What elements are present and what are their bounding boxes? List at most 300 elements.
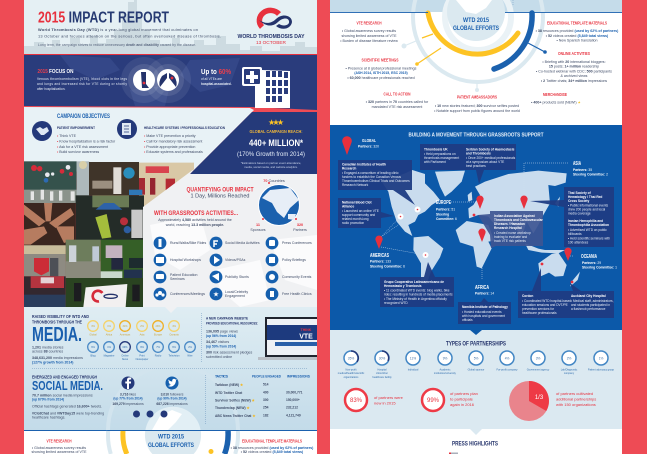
icon: hospital building (242, 67, 290, 108)
stat: 99% again: of partners plan (450, 391, 478, 396)
region labels: Partners: 320 (358, 144, 379, 148)
media type rings: 9% (140, 346, 145, 349)
info box: Cordon and Auckland: education sessions and DVT/PE (522, 303, 568, 307)
social media heading: SOCIAL MEDIA. (32, 378, 103, 393)
stat: 99% again: to participate (450, 396, 474, 402)
tactics table: 514 (263, 382, 269, 386)
impact headings: 1 Day, Millions Reached (190, 194, 250, 200)
tactics table: 150,000+ (286, 398, 300, 402)
tactics table: Thunderclap (NEW) ★ (215, 406, 250, 410)
activity icons grid: Social Media Activities (225, 241, 260, 245)
partnership rings: Lab/Diagnostic (561, 368, 578, 372)
region rings: 2% (140, 325, 145, 328)
region rings: 4% (172, 325, 177, 328)
partnership rings: 30% (379, 356, 385, 360)
info box: Cordon and Auckland: prevention services for (522, 307, 555, 311)
hub title: WTD 2015 (463, 17, 489, 24)
partnership rings: 11% (410, 356, 416, 360)
media type rings: Magazine (104, 354, 115, 358)
partnership rings: medical/health/scientific (338, 372, 365, 375)
text: VTE research: VTE RESEARCH (356, 20, 382, 26)
tactics table: ABC News Twitter Chat ★ (215, 414, 255, 418)
partnership rings: 5% (474, 356, 478, 360)
website stats: (up 59% from 2014) (206, 344, 236, 348)
info box: Thai and Iranian societies: • Public informational events (568, 204, 609, 208)
text: call to action (366, 92, 429, 109)
info box: Cordon and Auckland: healthcare professionals (522, 311, 557, 315)
stat: 83% new partners: 83% (350, 398, 363, 404)
icon: twitter (166, 376, 178, 390)
website stats: 136,095 page views (206, 330, 238, 334)
partnership rings: Individual (408, 368, 419, 372)
info box: Namibia Institute: Namibia Institute of Pathology (462, 305, 508, 309)
info box: Thai and Iranian societies: Iranian Hemophilia and (568, 219, 603, 223)
partnership rings: 4% (505, 356, 509, 360)
media type rings: 2% (188, 346, 193, 349)
region rings: 23% (155, 325, 161, 328)
media type rings: News (122, 358, 129, 361)
info box: Indian Association: • Created nurse workshop (494, 231, 531, 235)
text: online activities: • Co-hosted webinar with CDC; 500 participants (536, 70, 612, 74)
facebook stats (112, 392, 144, 406)
activity icons grid: Hospital Workshops (170, 258, 201, 262)
info box: Cordon and Auckland (518, 268, 614, 318)
website stats (206, 316, 258, 359)
info box: Grupo Cooperativo (380, 262, 454, 307)
panel: global efforts (left page fragment): • Global awareness survey results (32, 446, 86, 450)
healthcare education list: HEALTHCARE SYSTEMS / PROFESSIONALS EDUCATION (144, 126, 225, 130)
pale globe and arcs rising from the section below (108, 365, 238, 430)
panel: global campaign reach (190, 112, 317, 174)
activity icons grid: Community Events (282, 275, 312, 279)
region labels: Partners: 35 (573, 168, 592, 172)
text: call to action: CALL TO ACTION (384, 92, 410, 96)
region labels: ASIA (573, 161, 581, 167)
partnership rings: 9% (443, 356, 447, 360)
region labels: Partners: 14 (475, 292, 494, 296)
panel: media and social media (24, 307, 317, 431)
info box: National Blood Clot Alliance: Alliance (342, 204, 354, 208)
stat: 83% new partners: of partners were (374, 395, 404, 400)
stat: 99% again: again in 2016 (450, 402, 475, 407)
region labels: Committee: 6 (436, 217, 457, 221)
pie: one third: 1/3 (535, 395, 544, 401)
info box: Namibia Institute: with hospitals and government (462, 314, 505, 318)
region labels (358, 138, 617, 296)
activity icons grid: ★ (213, 290, 219, 298)
panel: global efforts (left page fragment): WTD 2015 (158, 434, 184, 440)
region rings: 31% (122, 325, 128, 328)
activity icons grid: Runs/Walks/Bike Rides (170, 241, 206, 245)
region labels: Partners: 51 (436, 208, 455, 212)
info box: Namibia Institute (458, 298, 511, 324)
info box: Cordon and Auckland: a flashmob performance (571, 307, 606, 311)
media type rings: Online (121, 354, 129, 358)
info box: Namibia Institute: officials (462, 318, 473, 322)
tactics table: 232,212 (286, 406, 298, 410)
panel: global campaign reach: GLOBAL CAMPAIGN REACH: (250, 129, 303, 134)
partnership rings: Global sponsor (468, 368, 485, 372)
text: scientific meetings: (ASH 2014, ISTH 2015, ESC 2015) (354, 71, 408, 75)
focus text (37, 69, 127, 91)
info box: Thai and Iranian societies: Cross Society (568, 199, 589, 203)
icon: facebook (122, 376, 134, 390)
healthcare education list: • Educate systems and professionals (144, 150, 203, 154)
partnership rings: institution/university (434, 372, 457, 375)
text: online activities: 15 posts; 1+ million readership (549, 64, 599, 68)
info box: Canadian Institutes: Canadian Institutes of Health (342, 162, 386, 166)
tactics table: 300 (263, 398, 269, 402)
tactics table: 400 (263, 390, 269, 394)
icon: leg and lung circles (121, 57, 191, 103)
stat: up to 60%: of all VTEs are (201, 77, 222, 81)
panel: types of partnerships: TYPES OF PARTNERSHIPS (446, 342, 506, 348)
region rings: Oceania (169, 334, 179, 336)
panel: header (24, 0, 317, 55)
text: educational materials: • 52 videos created (5,849 total views) (546, 34, 609, 38)
partnership rings: 1% (599, 356, 603, 360)
stat: 83% new partners: new in 2015 (374, 400, 396, 406)
tactics table: TACTICS (215, 374, 229, 378)
logo: World Thrombosis Day: WORLD THROMBOSIS DAY (238, 34, 305, 40)
info box: Thai and Iranian societies: Hematology / Thai Red (568, 195, 602, 199)
media heading: THROMBOSIS THROUGH THE (32, 320, 82, 324)
text: merchandise: MERCHANDISE (543, 92, 567, 97)
website stats: 300 risk assessment pledges (206, 350, 253, 354)
text: scientific meetings (346, 58, 417, 80)
info box: Indian Association (478, 211, 543, 248)
text: scientific meetings: SCIENTIFIC MEETINGS (362, 58, 398, 62)
activity icons grid: Videos/PSAs (225, 258, 246, 262)
partnership rings: Hospital (377, 368, 387, 372)
info box: National Blood Clot Alliance: • Launched an online VTE (342, 209, 379, 213)
text: call to action: • 320 partners in 70 countries called for (366, 100, 429, 104)
panel: types of partnerships (330, 330, 622, 429)
activity icons grid: Publicity Stunts (225, 275, 249, 279)
media type rings: Radio (155, 354, 162, 358)
globe with stats (250, 179, 307, 232)
impact headings: Approximately 4,580 activities held around the (158, 218, 232, 222)
region rings: Global (89, 334, 97, 336)
panel: global campaign reach: *Estimations based on partner event attendance, (241, 161, 301, 165)
pie: one third: with 150 organizations (556, 402, 596, 407)
text: educational materials: EDUCATIONAL TEMPLATE MATERIALS (547, 20, 607, 26)
tactics table: Survivor Selfies (NEW) ★ (215, 398, 255, 402)
info box: Canadian Institutes: Research Network (342, 183, 369, 187)
info box: Cordon and Auckland: Cordon (522, 294, 533, 298)
patient empowerment list: • Know hospitalization is a risk factor (57, 140, 116, 144)
text: patient ambassadors: • 10 new stories featured; 300 survivor selfies posted (435, 104, 519, 108)
impact headings: QUANTIFYING OUR IMPACT (186, 188, 254, 194)
facebook stats: 169,279 impressions (112, 402, 144, 406)
media type rings: 7% (156, 346, 161, 349)
info box: Indian Association: Thrombosis and Cardiovascular (494, 218, 543, 222)
partnership rings: company (564, 372, 575, 375)
info box: Indian Association: Indian Association Against (494, 214, 536, 218)
info box: Thrombosis UK and Serbian Society: at a symposium about VTE (466, 160, 504, 164)
text: educational materials (536, 20, 619, 42)
partnership rings: Government agency (527, 368, 550, 372)
text: call to action: mandated VTE risk assessment (372, 105, 422, 109)
media heading: MEDIA. (32, 324, 82, 346)
logo: World Thrombosis Day (238, 10, 305, 45)
globe with stats: Partners (293, 228, 307, 232)
tactics table: 182 (263, 414, 269, 418)
stat: 83% new partners (345, 389, 404, 411)
media type rings (88, 342, 195, 361)
region labels: AMERICAS (370, 253, 389, 259)
social media heading: #ClotChat and #WTDay15 were top-trending (32, 412, 104, 416)
laptop screenshot: VTE (299, 334, 313, 340)
panel: global campaign reach: 440+ MILLION* (249, 138, 303, 148)
twitter stats: (up 90% from 2014) (157, 396, 187, 400)
info box: Thrombosis UK and Serbian Society: • Once 200+ medical professionals (466, 156, 516, 160)
icon: handshake (32, 121, 52, 141)
panel: press highlights (330, 429, 622, 454)
activity icons grid: Local/Celebrity (225, 290, 248, 294)
info box: Grupo Cooperativo: recognized WTD (384, 301, 408, 305)
stat: 99% again (422, 389, 478, 411)
faint world map (60, 55, 240, 106)
social media heading: 70.7 million social media impressions (32, 394, 93, 398)
info box: Thrombosis UK and Serbian Society: best practices (466, 164, 486, 168)
region labels: Steering Committee: 2 (573, 172, 608, 176)
region labels: AFRICA (475, 285, 489, 291)
markers (342, 136, 573, 283)
info box: Indian Association: Research Hospital (494, 226, 522, 230)
twitter stats (156, 392, 188, 406)
stat: up to 60%: Up to 60% (201, 69, 232, 76)
facebook stats: 3,716 likes (120, 392, 136, 396)
panel: global efforts (left page fragment) (24, 431, 317, 454)
info box: Thai and Iranian societies: Thrombophilia Association (568, 223, 609, 227)
activity icons grid: Policy Briefings (282, 258, 306, 262)
logo: World Thrombosis Day: 13 OCTOBER (256, 40, 287, 45)
panel: campaign objectives (24, 107, 254, 175)
partnership rings: Patient advocacy group (588, 368, 615, 372)
partnership rings: 2% (567, 356, 571, 360)
text: scientific meetings: • Presence at 8 global professional meetings (346, 66, 417, 70)
healthcare education list: • Provide appropriate prevention (144, 145, 195, 149)
panel: global efforts (left page fragment): showing limited awareness of VTE (32, 450, 87, 454)
info box: Grupo Cooperativo: • The Ministry of Health in Argentina officially (384, 297, 447, 301)
tactics table: 254 (263, 406, 269, 410)
hub title (453, 17, 500, 32)
patient empowerment list: PATIENT EMPOWERMENT (57, 126, 96, 130)
hub title: GLOBAL EFFORTS (453, 25, 500, 32)
partnership rings: For-profit company (497, 368, 518, 372)
text: VTE research: showing limited awareness of VTE (342, 34, 397, 38)
info box: Canadian Institutes: Thromboembolism Clinical Trials and Outcomes (342, 179, 410, 183)
partnership rings: organizations (344, 376, 359, 379)
partnership rings: Academic (440, 368, 451, 372)
info box: Thrombosis UK and Serbian Society: Thrombosis UK (424, 148, 448, 152)
globe with stats: 70 Countries (263, 179, 285, 183)
info box: Cordon and Auckland: • Medical staff, administrators, (571, 299, 614, 303)
text: merchandise (531, 92, 582, 104)
info box: National Blood Clot Alliance (338, 198, 394, 228)
patient empowerment list: • Ask for a VTE risk assessment (57, 145, 108, 149)
pie: one third: additional partnerships (556, 396, 596, 402)
healthcare education list: • Call for mandatory risk assessment (144, 140, 202, 144)
media type rings: 69% (122, 346, 128, 349)
text: online activities (536, 51, 612, 83)
text: educational materials: • New Spanish translation (556, 38, 598, 42)
global efforts hub (402, 0, 547, 92)
region rings: Africa (106, 334, 113, 336)
media heading: across 88 countries (32, 350, 63, 354)
website stats: submitted online (206, 355, 232, 359)
info box: Namibia Institute: • Hosted educational events (462, 310, 502, 314)
info box: Cordon and Auckland: • Coordinated WTD hospital-based (522, 299, 571, 303)
social media heading: ENERGIZED AND ENGAGED THROUGH (32, 374, 97, 380)
media type rings: Newspaper (136, 358, 148, 361)
text: VTE research (340, 20, 398, 43)
info box: National Blood Clot Alliance: related month-long (342, 217, 369, 221)
intro text: 13 October and focuses attention on the serious, but often overlooked disease of thrombosis. (38, 34, 221, 38)
patient empowerment list (57, 126, 116, 154)
city skyline (24, 0, 317, 54)
region rings: Asia (140, 334, 145, 336)
text: online activities: & archived views (561, 74, 588, 78)
website stats: 34,467 visitors (206, 340, 229, 344)
partnership rings (338, 351, 615, 379)
info box: Thai and Iranian societies: • Held scientific seminars with (568, 236, 610, 240)
activity icons grid: Patient Education (170, 273, 197, 277)
activity icons grid: Engagement (225, 294, 245, 298)
panel: top of right page (330, 0, 622, 125)
activity icons grid: Press Conferences (282, 241, 312, 245)
region labels: Steering (436, 212, 449, 216)
panel: 2015 focus (24, 55, 317, 110)
patient empowerment list: • Think VTE (57, 134, 77, 138)
social media heading: (up 670% from 2014) (32, 398, 64, 402)
text: online activities: • Briefing with 20 international bloggers: (542, 60, 606, 64)
stat: up to 60% (201, 69, 232, 86)
focus text: after hospitalization. (37, 87, 65, 91)
panel: global campaign reach: ★★★ (268, 118, 284, 127)
focus text: Venous thromboembolism (VTE), blood clots in the legs (37, 77, 127, 81)
tactics table: IMPRESSIONS (287, 374, 311, 378)
panel: press highlights: PRESS HIGHLIGHTS (452, 442, 498, 448)
intro text (38, 27, 221, 47)
media type rings: Print (139, 354, 145, 358)
partnership rings: Non-profit (346, 368, 357, 372)
region labels: GLOBAL (362, 138, 376, 143)
region labels: Partners: 29 (582, 261, 601, 265)
info box: Grupo Cooperativo: Grupo Cooperativo Latinoamericano de (384, 280, 444, 284)
media type rings: Blog (90, 354, 96, 358)
panel: grassroots map (330, 125, 622, 330)
photo collage (24, 161, 194, 307)
facebook stats: (up 77% from 2014) (113, 396, 143, 400)
text: patient ambassadors: • Notable support from public figures around the world (434, 109, 520, 113)
focus text: 2015 FOCUS ON (38, 69, 74, 75)
info box: Thai and Iranian societies: Thai Society of (568, 191, 592, 195)
healthcare education list (144, 126, 225, 154)
region labels: OCEANIA (581, 254, 597, 260)
panel: global efforts (left page fragment): VTE RESEARCH (46, 438, 72, 444)
panel: global efforts (left page fragment): GLOBAL EFFORTS (148, 442, 195, 449)
panel: global campaign reach: media, social media, and website analytics. (244, 165, 298, 169)
stat: up to 60%: hospital-associated. (201, 82, 232, 86)
media type rings: 6% (91, 346, 96, 349)
info box: Thrombosis UK and Serbian Society: thrombosis management (424, 156, 459, 160)
social media heading: Official hashtags generated 16,600+ tweets. (32, 404, 102, 408)
partnership rings: healthcare facility (372, 376, 392, 379)
info box: Canadian Institutes: • Engaged a consortium of leading clinic (342, 171, 399, 175)
panel: global efforts (left page fragment): • 52 videos created (5,849 total views) (241, 450, 304, 454)
media heading: 1,201 media stories (32, 346, 64, 350)
text: VTE research: • Global awareness survey results (342, 29, 396, 33)
info box: Cordon and Auckland: and students participated in (571, 303, 610, 307)
text: patient ambassadors: PATIENT AMBASSADORS (457, 94, 497, 100)
info box: Thrombosis UK and Serbian Society: with Parliament (424, 160, 446, 164)
intro text: Long term, the campaign strives to reduce unnecessary death and disability caused by the disease. (38, 43, 196, 47)
globe with stats: Sponsors (250, 228, 266, 232)
activity icons grid (154, 237, 312, 300)
stat: 99% again: 99% (427, 398, 440, 404)
panel: global campaign reach: (170% Growth from 2014) (237, 152, 305, 158)
social media heading: healthcare hashtags. (32, 416, 65, 420)
info box: Cordon and Auckland: Auckland City Hospital (571, 294, 606, 298)
laptop screenshot: THINK (301, 328, 312, 332)
info box: Thai and Iranian societies: • Advertised WTD on public (568, 228, 607, 232)
partnership rings: 3% (536, 356, 540, 360)
media type rings: Wire (187, 354, 193, 358)
globe with stats: 11 (256, 223, 260, 227)
info box: Thai and Iranian societies: 100 attendees (568, 240, 589, 244)
website stats: PROVIDED EDUCATIONAL RESOURCES: (206, 322, 258, 326)
info box: Thrombosis UK and Serbian Society: and Thrombosis (466, 152, 491, 156)
panel: campaign objectives: CAMPAIGN OBJECTIVES (57, 114, 110, 120)
text: merchandise: • 400+ products sold (NEW!) ★ (531, 100, 582, 104)
panel: quantifying our impact (143, 169, 317, 307)
activity icons grid: Seminars (170, 277, 185, 281)
media heading (32, 314, 89, 364)
connector lines (381, 163, 573, 279)
region labels: Partners: 133 (370, 260, 391, 264)
website stats: (up 56% from 2014) (206, 334, 236, 338)
info box: National Blood Clot Alliance: radio promotion (342, 221, 364, 225)
media type rings: Television (169, 354, 180, 358)
info box: Thai and Iranian societies: billboards (568, 232, 582, 236)
media type rings: 6% (172, 346, 177, 349)
media heading: RAISED VISIBILITY OF WTD AND (32, 314, 89, 319)
region rings: 3% (91, 325, 96, 328)
website stats: A NEW CAMPAIGN WEBSITE (206, 316, 248, 320)
info box: Grupo Cooperativo: rides: resulting in hundreds of media placements (384, 292, 453, 296)
text: VTE research: • Burden of disease literature review (340, 39, 398, 43)
tactics table (215, 374, 311, 418)
info box: Grupo Cooperativo: • 11 coordinated WTD events: blog walks, bike (384, 288, 450, 292)
info box: Indian Association: Diseases / Hamadan (494, 222, 525, 226)
tactics table: 30,000,771 (286, 390, 303, 394)
partnership rings: clinic/other (376, 372, 388, 375)
tactics table: 4,121,749 (286, 414, 301, 418)
info box: Indian Association: track VTE risk patients (494, 239, 526, 243)
twitter stats: 687,226 impressions (156, 402, 188, 406)
globe with stats: 320 (297, 223, 303, 227)
world map (382, 170, 580, 287)
panel: global efforts (left page fragment): EDUCATIONAL TEMPLATE MATERIALS (242, 438, 302, 444)
region labels: Steering Committee: 1 (582, 266, 617, 270)
info box: Thai and Iranian societies: media coverage (568, 212, 591, 216)
info box: National Blood Clot Alliance: National Blood Clot (342, 200, 373, 204)
text: online activities: ONLINE ACTIVITIES (558, 51, 590, 56)
info box: Thrombosis UK and Serbian Society: • Held preparations on (424, 152, 456, 156)
healthcare education list: • Make VTE prevention a priority (144, 134, 196, 138)
